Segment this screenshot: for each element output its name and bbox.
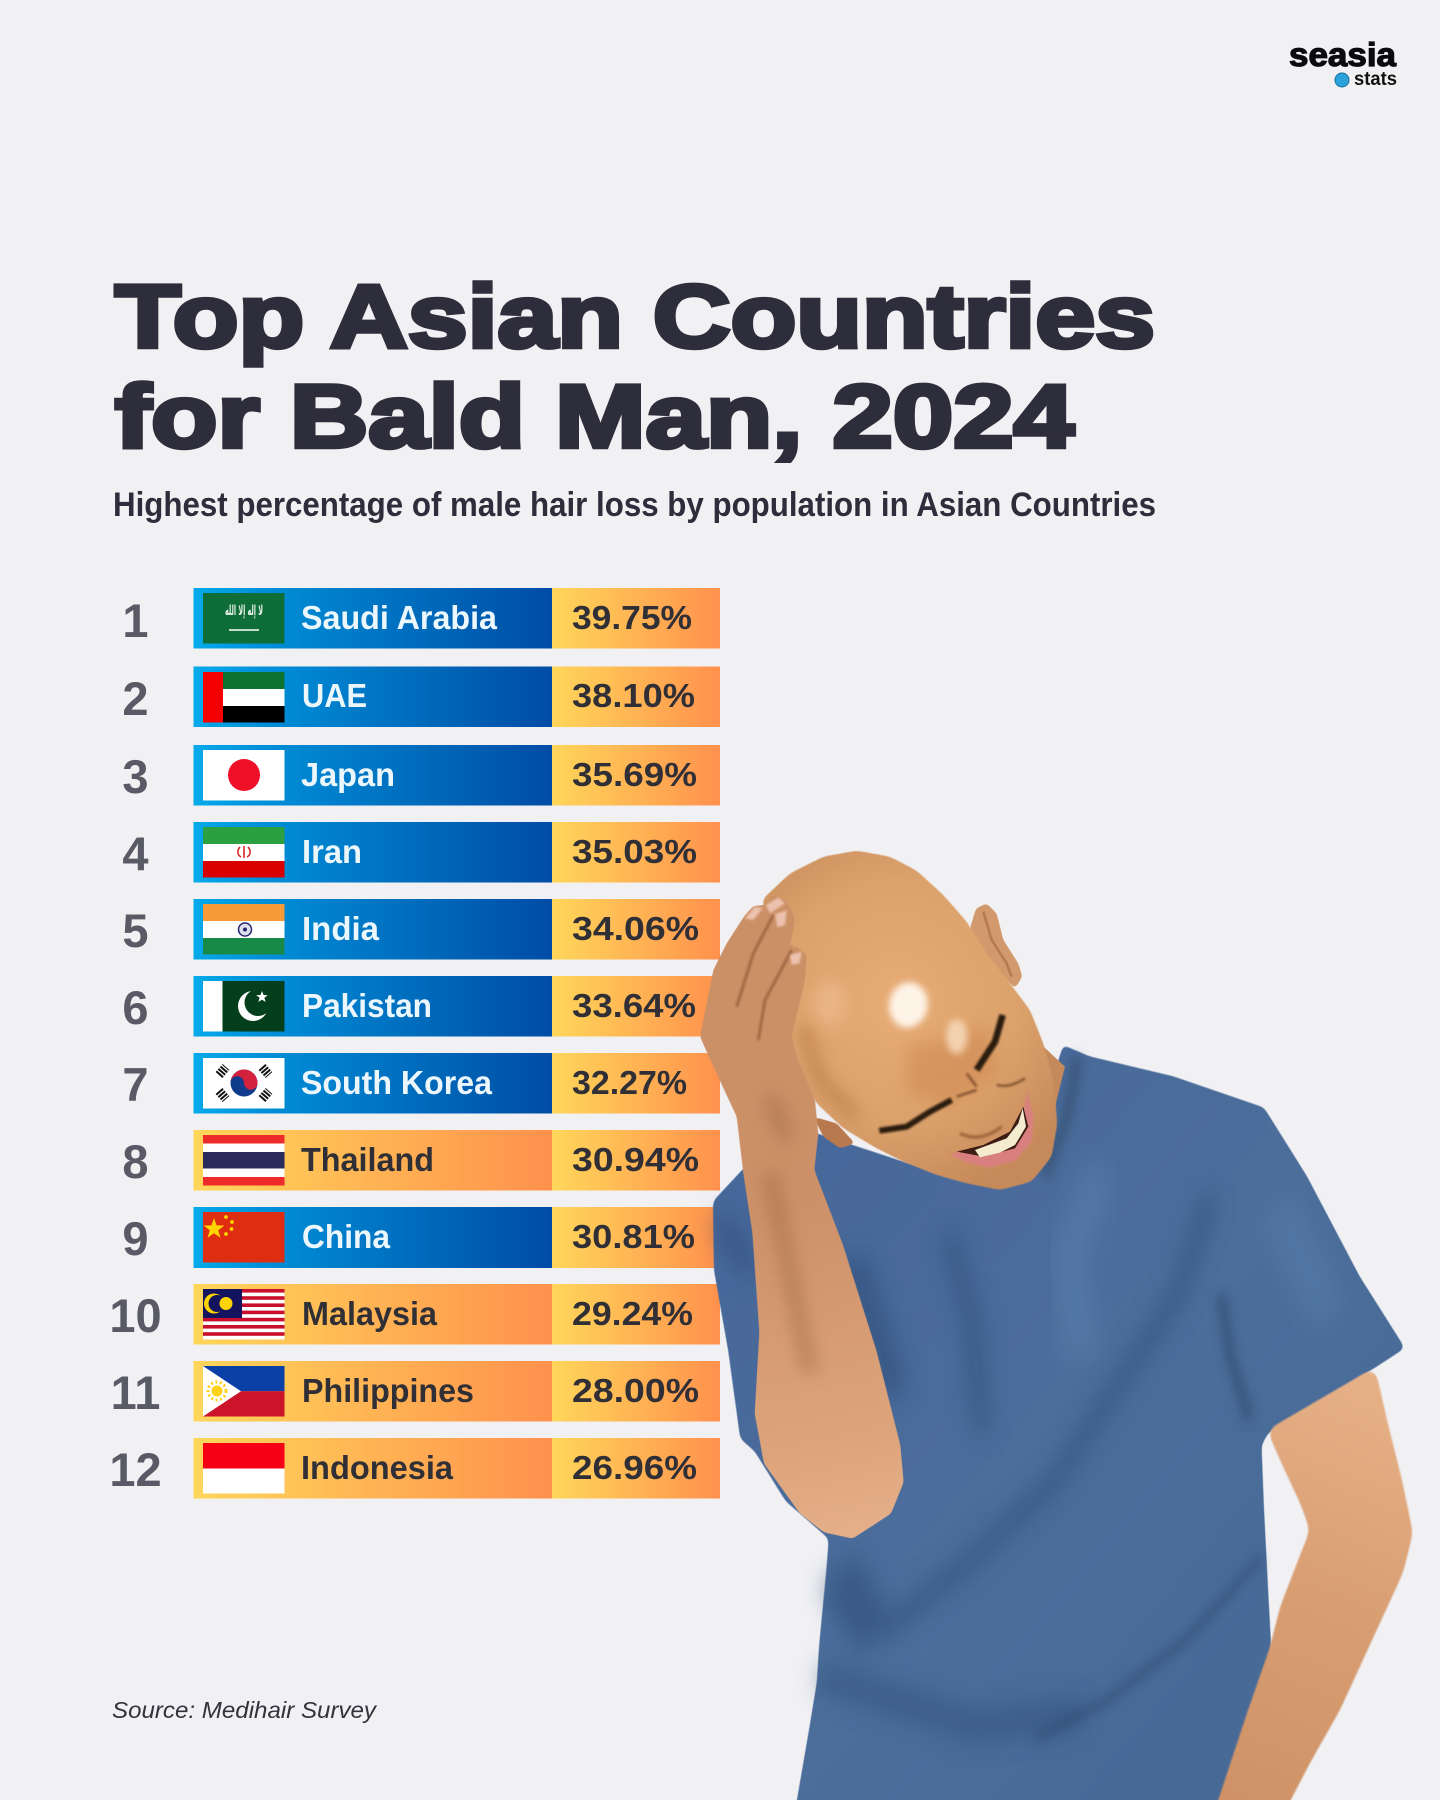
row 6: Pakistan	[122, 976, 720, 1036]
neck	[1023, 1043, 1065, 1140]
row 8: Thailand: Thailand	[301, 1141, 434, 1178]
row 7: South Korea: 7	[122, 1058, 149, 1111]
flag: UAE	[203, 672, 284, 722]
row 3: Japan: 3	[122, 750, 149, 803]
row 8: Thailand: 30.94%	[572, 1141, 699, 1178]
row 7: South Korea: South Korea	[301, 1064, 493, 1101]
flag: India	[203, 904, 284, 954]
row 11: Philippines: Philippines	[302, 1372, 474, 1409]
title: for Bald Man, 2024	[115, 366, 1075, 466]
row 2: UAE: UAE	[302, 677, 367, 714]
row 10: Malaysia: Malaysia	[302, 1295, 438, 1332]
ranking list	[109, 588, 720, 1498]
right arm	[1205, 1367, 1413, 1800]
row 2: UAE	[122, 666, 720, 727]
row 5: India: 34.06%	[572, 910, 699, 947]
row 8: Thailand	[122, 1130, 720, 1190]
ear: left under hand	[813, 1117, 855, 1148]
head	[762, 851, 1057, 1190]
row 2: UAE: 38.10%	[572, 677, 695, 714]
row 6: Pakistan: 6	[122, 981, 149, 1034]
flag: Saudi Arabia: لا إله إلا الله	[225, 603, 263, 619]
row 1: Saudi Arabia: 39.75%	[572, 599, 692, 636]
row 11: Philippines	[111, 1361, 720, 1422]
raised arm and hand	[700, 895, 904, 1539]
row 12: Indonesia: 12	[109, 1443, 162, 1496]
row 10: Malaysia: 10	[109, 1289, 162, 1342]
eyebrows and eyes	[977, 1015, 1003, 1070]
row 4: Iran: 4	[122, 827, 149, 880]
logo: seasia stats: stats	[1354, 69, 1397, 90]
row 3: Japan: Japan	[301, 756, 395, 793]
logo: seasia stats: seasia	[1289, 36, 1397, 73]
row 11: Philippines: 11	[111, 1366, 160, 1419]
row 4: Iran: 35.03%	[572, 833, 697, 870]
source note: Source: Medihair Survey	[112, 1697, 378, 1723]
row 12: Indonesia	[109, 1438, 720, 1498]
flag: Pakistan	[203, 981, 284, 1032]
row 12: Indonesia: Indonesia	[301, 1449, 454, 1486]
flag: Japan	[203, 750, 284, 800]
row 1: Saudi Arabia: Saudi Arabia	[301, 599, 498, 636]
row 3: Japan: 35.69%	[572, 756, 697, 793]
row 4: Iran: Iran	[302, 833, 362, 870]
row 3: Japan	[122, 745, 720, 806]
flag: Iran	[203, 827, 284, 878]
row 5: India: India	[302, 910, 380, 947]
mouth	[950, 1090, 1033, 1167]
flag: Saudi Arabia	[203, 593, 284, 644]
row 8: Thailand: 8	[122, 1135, 149, 1188]
row 5: India	[122, 899, 720, 960]
flag: Malaysia	[203, 1289, 284, 1340]
row 9: China: 30.81%	[572, 1218, 695, 1255]
t-shirt	[713, 1045, 1405, 1800]
row 9: China: China	[302, 1218, 391, 1255]
logo: seasia stats	[1289, 36, 1397, 90]
head, neck and raised arm	[700, 851, 1065, 1539]
row 7: South Korea: 32.27%	[572, 1064, 687, 1101]
row 10: Malaysia: 29.24%	[572, 1295, 693, 1332]
flag: Indonesia	[203, 1443, 284, 1494]
ear: right	[970, 903, 1022, 988]
row 7: South Korea	[122, 1053, 720, 1114]
flag: South Korea	[203, 1058, 284, 1108]
row 12: Indonesia: 26.96%	[572, 1449, 697, 1486]
row 4: Iran	[122, 822, 720, 882]
row 11: Philippines: 28.00%	[572, 1372, 699, 1409]
nose	[960, 1127, 1002, 1137]
row 6: Pakistan: 33.64%	[572, 987, 696, 1024]
title: Top Asian Countries	[115, 266, 1155, 366]
row 6: Pakistan: Pakistan	[302, 987, 432, 1024]
row 2: UAE: 2	[122, 672, 149, 725]
flag: Thailand	[203, 1135, 284, 1186]
row 9: China	[122, 1207, 720, 1268]
illustration: bald man holding his head	[700, 851, 1413, 1800]
flag: Philippines	[203, 1366, 284, 1416]
row 9: China: 9	[122, 1212, 149, 1265]
row 1: Saudi Arabia: 1	[122, 594, 149, 647]
title	[115, 266, 1155, 466]
flag: China	[203, 1212, 284, 1262]
row 5: India: 5	[122, 904, 149, 957]
row 1: Saudi Arabia	[122, 588, 720, 648]
row 10: Malaysia	[109, 1284, 720, 1344]
subtitle: Highest percentage of male hair loss by population in Asian Countries	[113, 486, 1156, 524]
